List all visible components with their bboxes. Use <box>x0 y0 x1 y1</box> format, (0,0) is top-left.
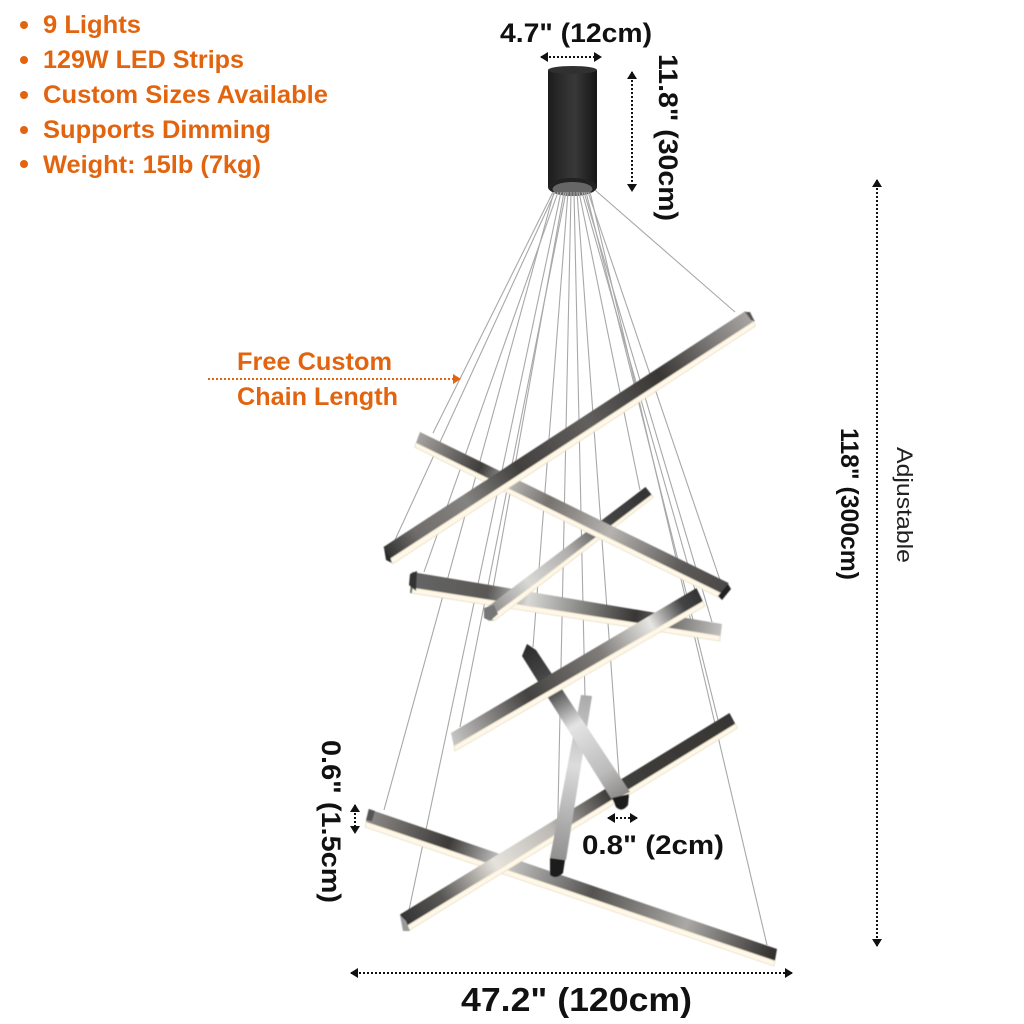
feature list: 9 Lights <box>43 11 141 39</box>
annotation: overall height <box>835 180 917 946</box>
feature list: Custom Sizes Available <box>43 81 328 109</box>
feature list: Weight: 15lb (7kg) <box>43 151 261 179</box>
bar 3: upper short rising bar <box>484 487 654 621</box>
bar 8: lower rising bar <box>400 713 738 931</box>
annotation: overall height: Adjustable <box>892 447 917 563</box>
bar 7: short steep bar <box>550 695 592 877</box>
annotation: bar height: 0.6" (1.5cm) <box>316 740 346 903</box>
bar 5: middle rising bar <box>451 588 705 751</box>
annotation: free custom chain length <box>208 348 460 411</box>
chandelier light bars <box>365 311 777 966</box>
annotation: canopy height: 11.8" (30cm) <box>653 54 683 221</box>
annotation: free custom chain length: Chain Length <box>237 383 398 411</box>
canopy cylinder <box>548 66 597 196</box>
annotation: canopy width: 4.7" (12cm) <box>500 18 652 48</box>
annotation: overall height: 118" (300cm) <box>835 428 863 580</box>
suspension wires <box>384 190 767 945</box>
annotation: overall width: 47.2" (120cm) <box>461 981 692 1018</box>
bar 2: upper falling bar <box>414 432 731 600</box>
feature list <box>20 11 328 179</box>
bar 9: long lower bar <box>365 809 777 966</box>
bar 6: short falling bar <box>522 644 630 810</box>
feature list: Supports Dimming <box>43 116 271 144</box>
annotation: bar width: 0.8" (2cm) <box>582 830 724 860</box>
bar 4: upper nearly level bar <box>409 571 722 641</box>
annotation: free custom chain length: Free Custom <box>237 348 392 376</box>
bar 1: top long rising bar <box>384 311 756 564</box>
feature list: 129W LED Strips <box>43 46 244 74</box>
